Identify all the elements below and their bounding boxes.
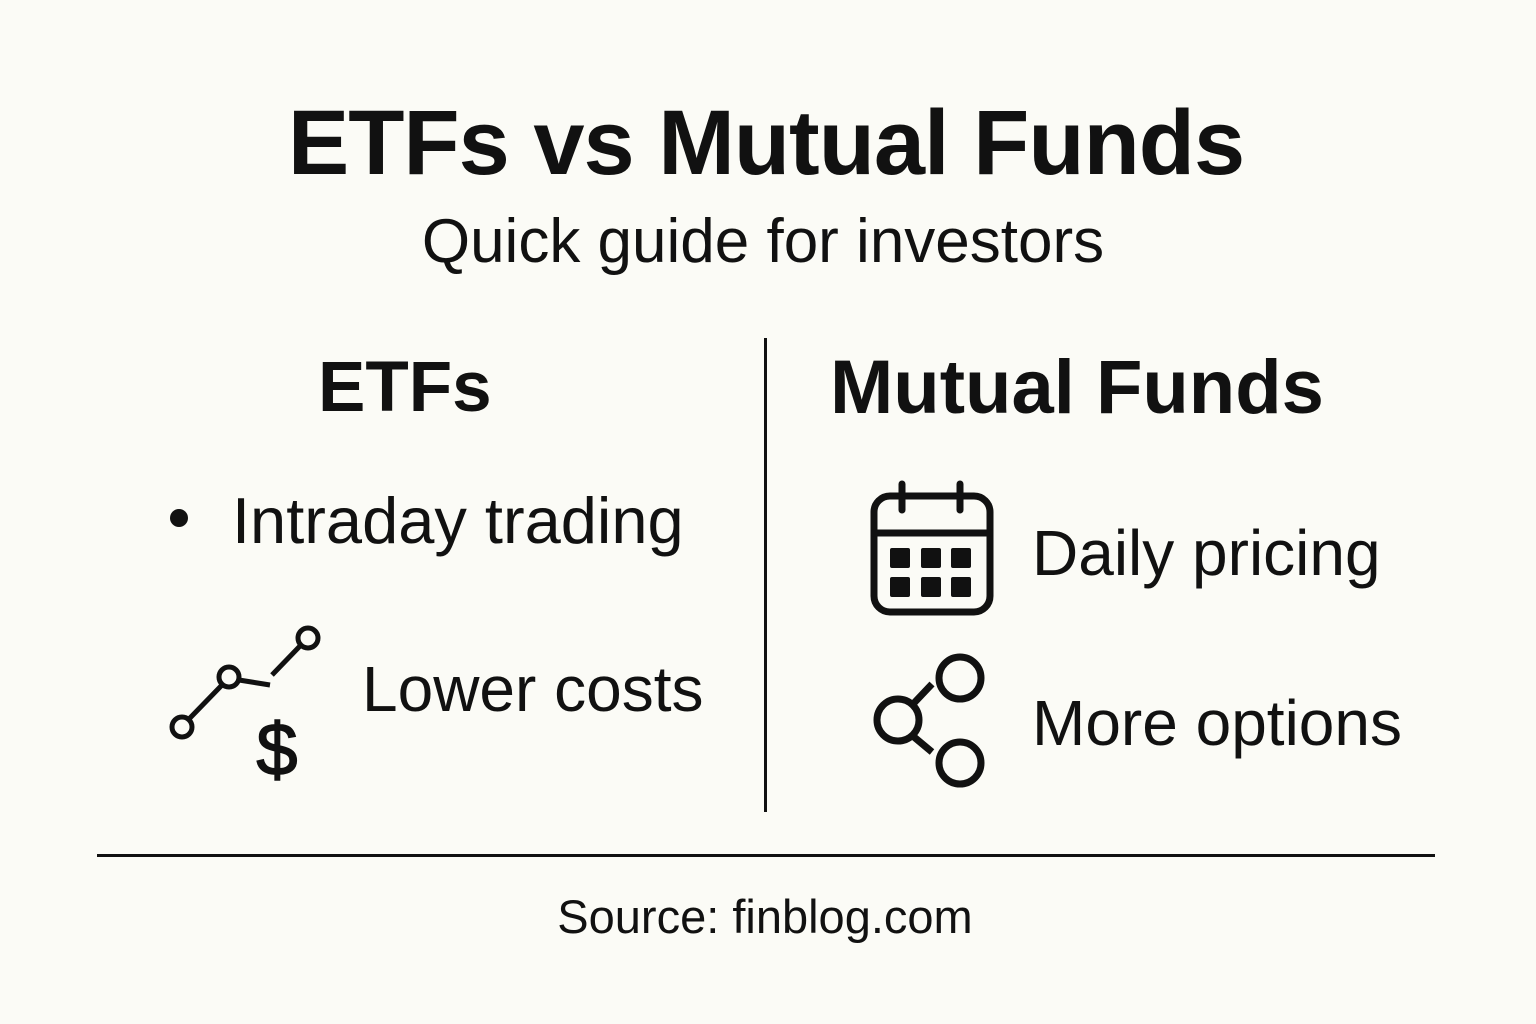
heading: Mutual Funds: Mutual Funds [830,345,1324,430]
icon: calendar [870,480,994,616]
divider horizontal [97,854,1435,857]
heading: ETFs: ETFs [318,348,492,427]
panel: ETFs [170,348,703,790]
icon: share nodes [874,654,984,788]
panel: Mutual Funds [830,345,1402,788]
icon: chart with dollar: $ [256,708,298,790]
divider vertical [764,338,767,812]
subtitle: Quick guide for investors [422,207,1104,276]
bullet: intraday trading: Intraday trading [232,484,684,557]
text: more options: More options [1032,687,1402,759]
source: Source: finblog.com [557,890,973,943]
title: ETFs vs Mutual Funds [288,92,1244,194]
text: daily pricing: Daily pricing [1032,517,1381,589]
text: lower costs: Lower costs [362,653,703,725]
icon: chart with dollar [170,626,320,790]
